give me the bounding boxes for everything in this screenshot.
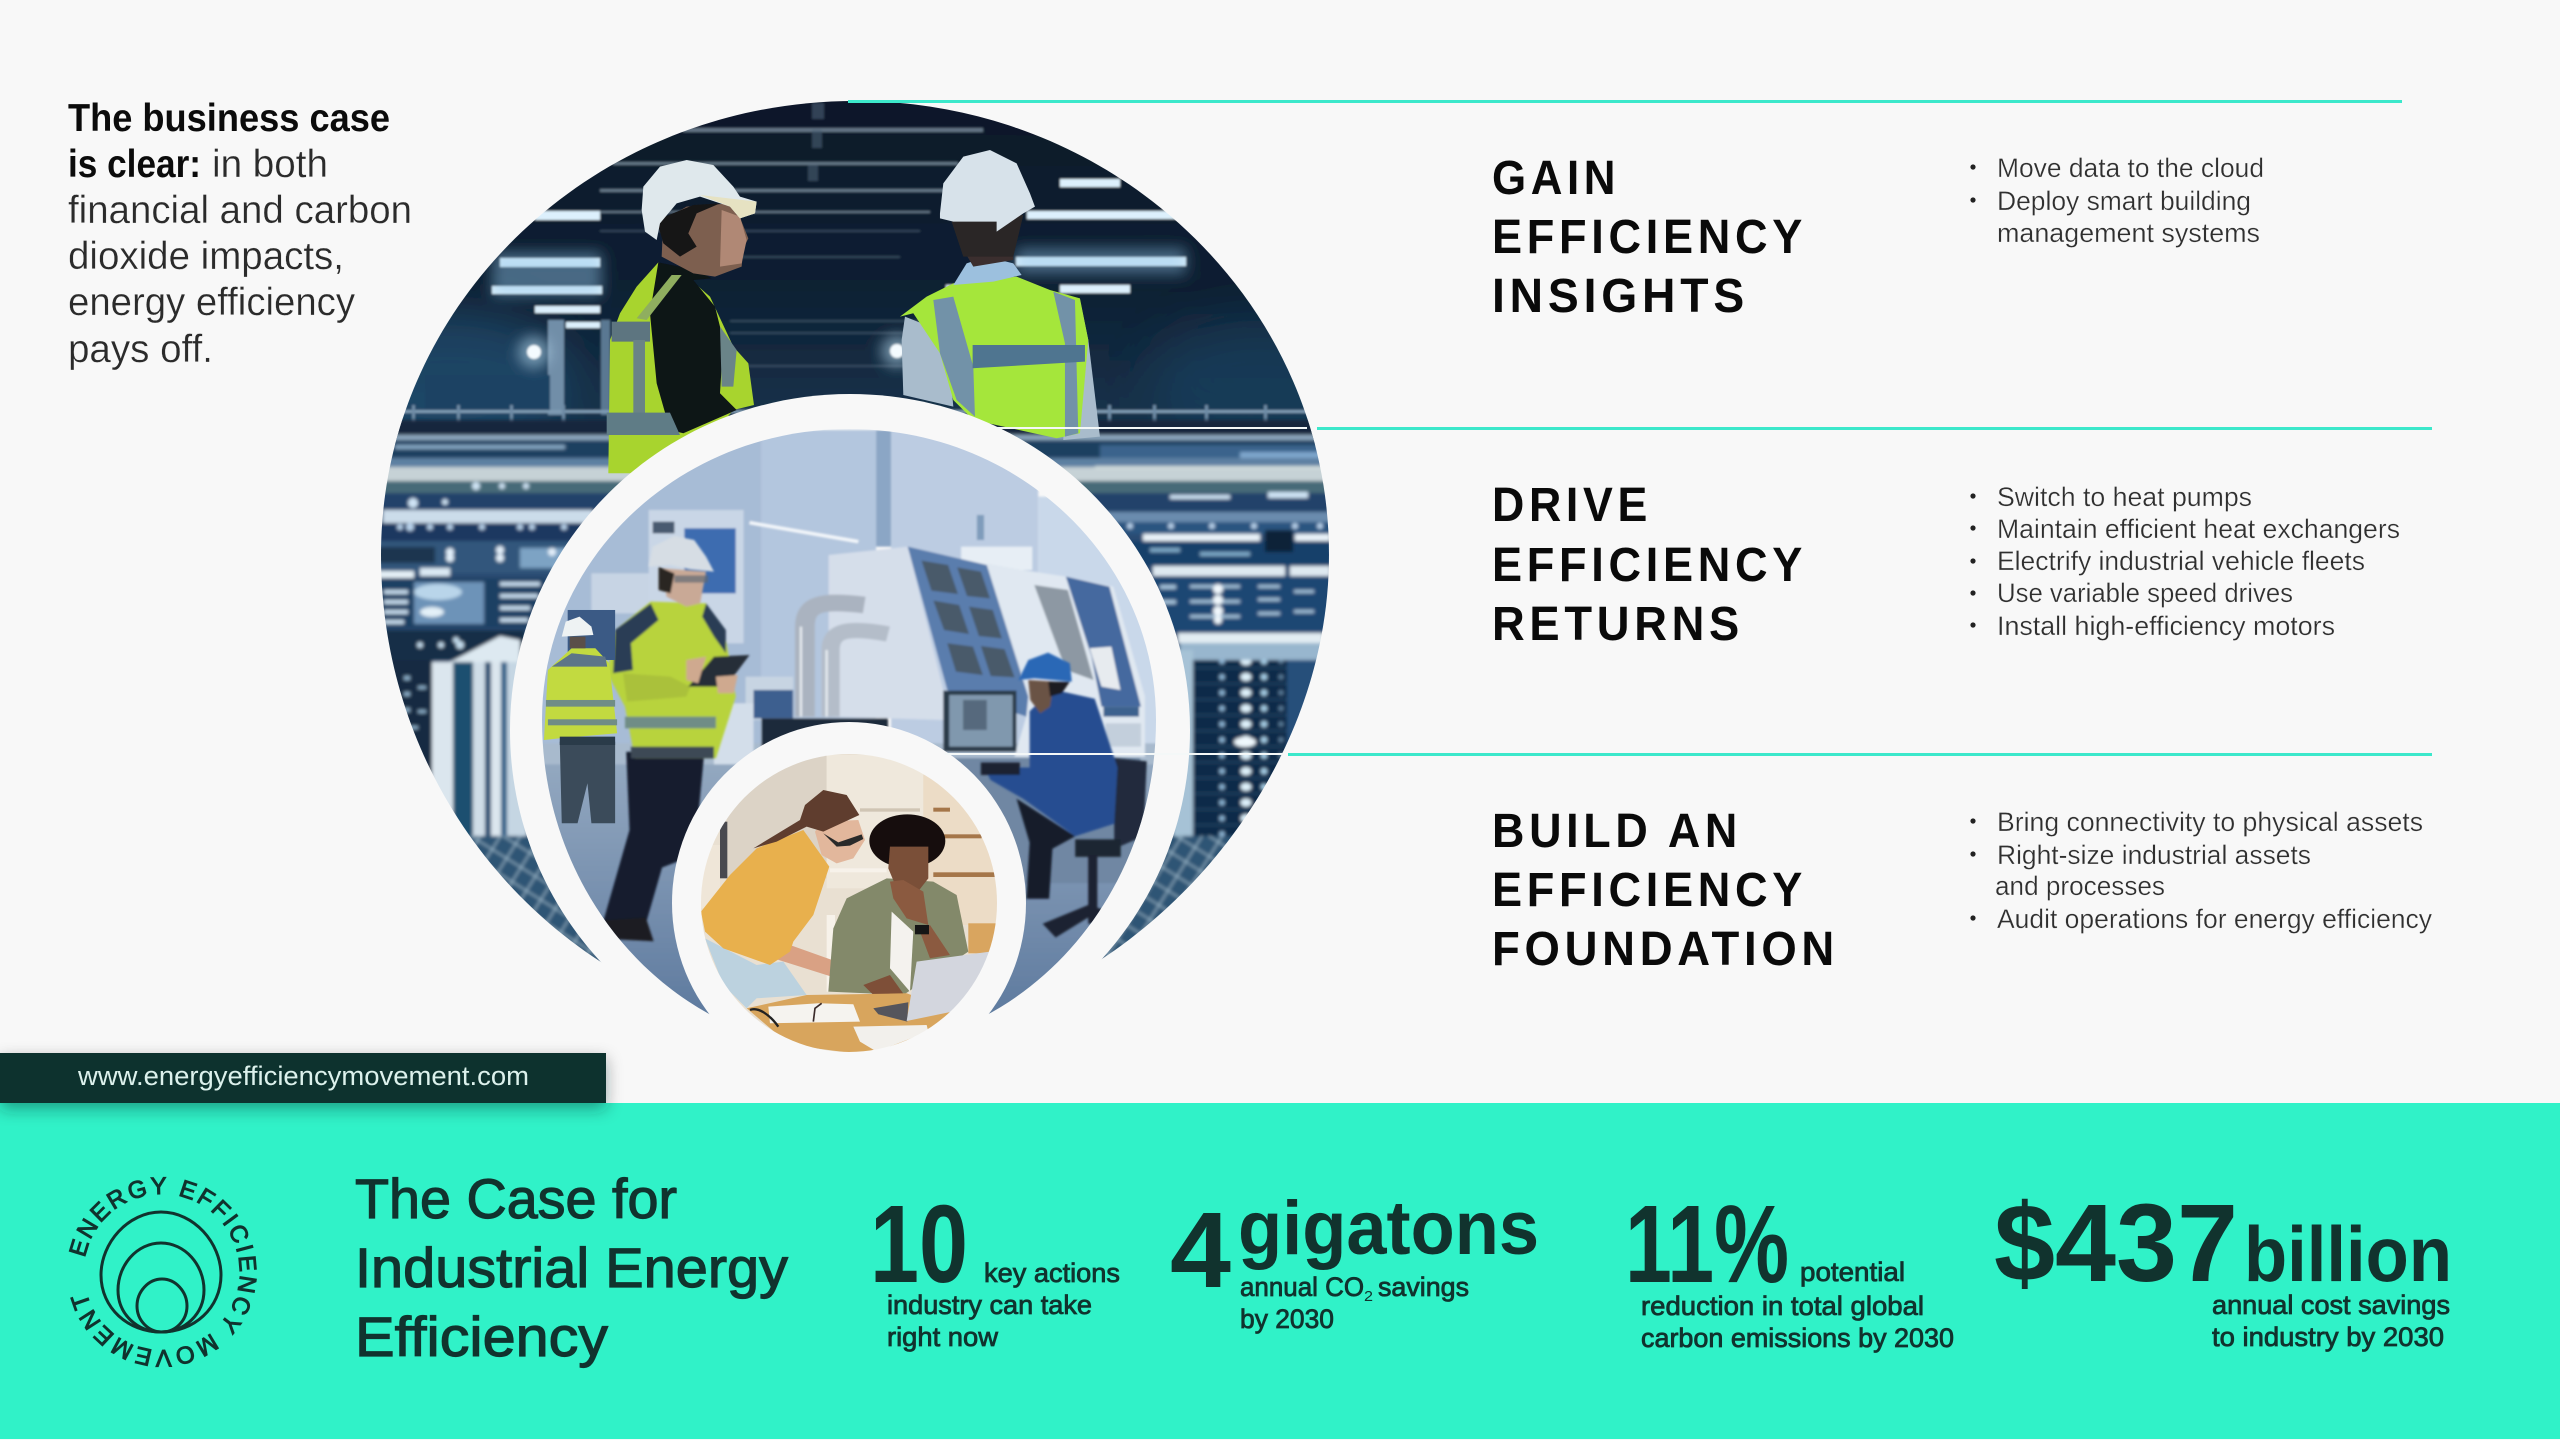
action list: build an efficiency foundation <box>1970 807 2432 934</box>
stat: 10 key actions: industry can take <box>887 1290 1092 1320</box>
stat: $437 billion <box>1994 1182 2452 1352</box>
white ring around middle oval <box>510 394 1190 1071</box>
stat: 4 gigatons: by 2030 <box>1240 1304 1334 1334</box>
action heading: gain efficiency insights <box>1492 152 1807 323</box>
stat: $437 billion: to industry by 2030 <box>2212 1322 2444 1352</box>
footer title: Industrial Energy <box>355 1236 788 1299</box>
footer title: The Case for <box>355 1167 677 1230</box>
action heading: gain efficiency insights: GAIN <box>1492 152 1620 205</box>
worker seen from behind <box>544 610 617 823</box>
stat: $437 billion: annual cost savings <box>2212 1290 2450 1320</box>
action heading: build an efficiency foundation <box>1492 805 1839 976</box>
photo: middle oval, technicians at machines <box>542 429 1156 1014</box>
seated operator with blue helmet <box>981 653 1147 938</box>
stat: 11% potential: potential <box>1800 1257 1905 1287</box>
photo: large oval, workers in a factory hall <box>381 101 1329 962</box>
intro text block: energy efficiency <box>68 281 355 324</box>
stat: 10 key actions: key actions <box>984 1258 1120 1288</box>
action list: drive efficiency returns: Switch to heat pumps <box>1997 482 2252 512</box>
stat: 10 key actions: right now <box>887 1322 999 1352</box>
action heading: drive efficiency returns: EFFICIENCY <box>1492 539 1807 592</box>
white ring around small circle <box>672 722 1026 1084</box>
logo: energy efficiency movement: ENERGY EFFICIENCY MOVEMENT <box>68 1176 257 1368</box>
stat: 11% potential <box>1625 1183 1954 1353</box>
stat: 4 gigatons: 4 <box>1170 1189 1231 1310</box>
action heading: drive efficiency returns <box>1492 479 1807 651</box>
stat: 4 gigatons: 2 <box>1364 1288 1373 1305</box>
stat: 4 gigatons: gigatons <box>1238 1186 1539 1271</box>
stat: 4 gigatons <box>1170 1186 1539 1334</box>
footer title: Efficiency <box>355 1305 608 1368</box>
photo: small circle, two colleagues at a laptop <box>701 754 997 1052</box>
action list: drive efficiency returns: Electrify industrial vehicle fleets <box>1997 546 2365 576</box>
action list: build an efficiency foundation: Right-size industrial assets <box>1997 840 2311 870</box>
stat: 10 key actions <box>870 1183 1120 1352</box>
factory machinery and server racks <box>381 418 1329 962</box>
action heading: build an efficiency foundation: EFFICIENCY <box>1492 864 1807 917</box>
action heading: drive efficiency returns: RETURNS <box>1492 598 1744 651</box>
action list: drive efficiency returns: Install high-efficiency motors <box>1997 611 2335 641</box>
stat: 11% potential: reduction in total global <box>1641 1291 1924 1321</box>
intro text block <box>68 97 412 371</box>
stat: 4 gigatons: savings <box>1378 1272 1469 1302</box>
action list: gain efficiency insights: Deploy smart building <box>1997 186 2251 216</box>
action list: drive efficiency returns: Use variable speed drives <box>1997 578 2293 608</box>
teal divider lines <box>848 100 2432 756</box>
action list: drive efficiency returns: Maintain efficient heat exchangers <box>1997 514 2400 544</box>
intro text block: in both <box>212 143 328 186</box>
action heading: gain efficiency insights: EFFICIENCY <box>1492 211 1807 264</box>
technician with tablet <box>602 536 750 941</box>
worker in white hard hat and neon vest, right <box>900 150 1100 440</box>
man in olive shirt <box>828 814 968 998</box>
intro text block: The business case <box>68 97 390 140</box>
action list: build an efficiency foundation: Audit operations for energy efficiency <box>1997 904 2432 934</box>
action heading: build an efficiency foundation: BUILD AN <box>1492 805 1742 858</box>
intro text block: pays off. <box>68 328 213 371</box>
stat: $437 billion: billion <box>2244 1210 2452 1298</box>
action list: build an efficiency foundation: and processes <box>1995 871 2165 901</box>
stat: $437 billion: $437 <box>1994 1182 2238 1305</box>
woman in yellow shirt <box>701 790 867 1008</box>
action heading: gain efficiency insights: INSIGHTS <box>1492 270 1749 323</box>
desk with notebook, papers and laptop <box>747 952 990 1055</box>
teal footer band <box>0 1103 2560 1439</box>
intro text block: dioxide impacts, <box>68 235 344 278</box>
stat: 11% potential: carbon emissions by 2030 <box>1641 1323 1954 1353</box>
stat: 4 gigatons: annual CO <box>1240 1272 1364 1302</box>
stat: 11% potential: 11% <box>1625 1183 1789 1306</box>
stat: 10 key actions: 10 <box>870 1183 968 1306</box>
website bar: www.energyefficiencymovement.com <box>77 1061 529 1091</box>
intro text block: financial and carbon <box>68 189 412 232</box>
action heading: build an efficiency foundation: FOUNDATION <box>1492 923 1839 976</box>
footer title <box>355 1167 788 1368</box>
action heading: drive efficiency returns: DRIVE <box>1492 479 1652 532</box>
website bar <box>0 1053 606 1103</box>
action list: build an efficiency foundation: Bring connectivity to physical assets <box>1997 807 2423 837</box>
action list: gain efficiency insights: management systems <box>1997 218 2260 248</box>
action list: drive efficiency returns <box>1970 482 2400 641</box>
action list: gain efficiency insights: Move data to the cloud <box>1997 153 2264 183</box>
worker in white hard hat and neon vest, left <box>607 160 757 473</box>
action list: gain efficiency insights <box>1970 153 2264 248</box>
intro text block: is clear: <box>68 143 201 186</box>
